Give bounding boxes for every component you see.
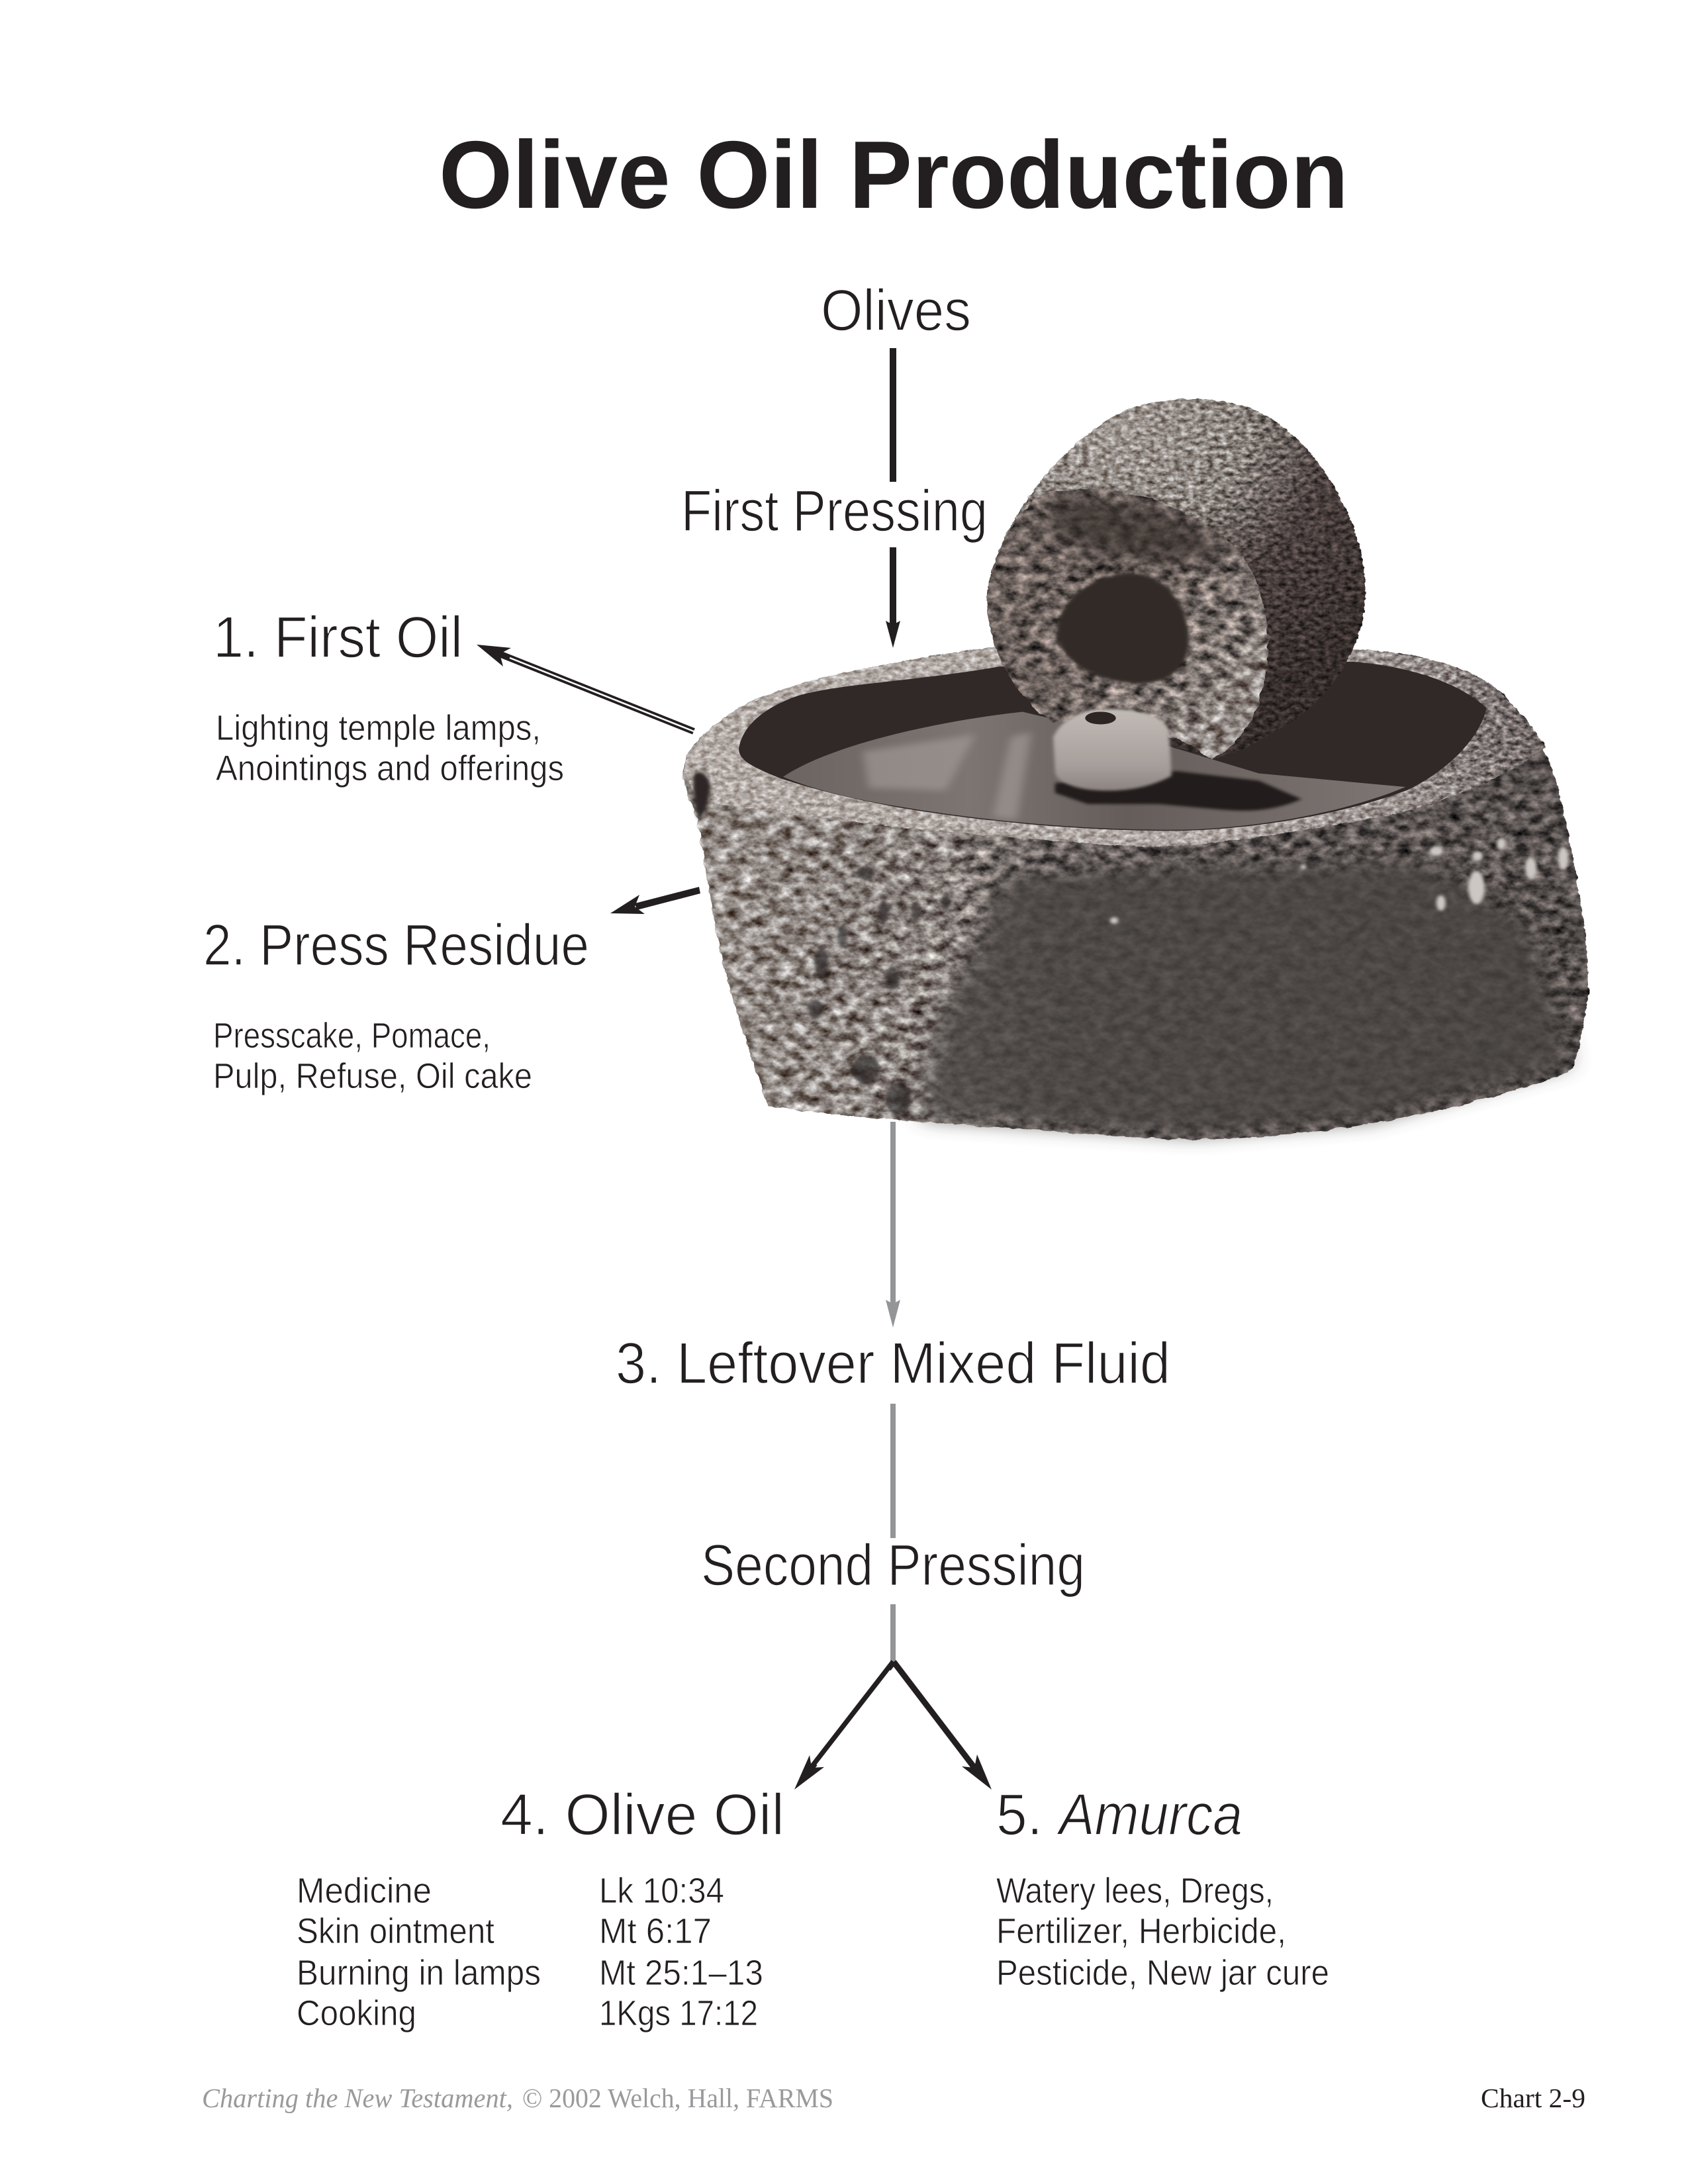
hub shadow [1055, 771, 1301, 811]
text: press residue terms [213, 1016, 532, 1096]
text: press residue terms: Pulp, Refuse, Oil cake [213, 1056, 532, 1096]
list: olive oil uses: Medicine [297, 1871, 432, 1911]
pits in lit side [808, 866, 951, 1115]
arrow: fork to amurca [894, 1662, 992, 1790]
heading: press residue: 2. Press Residue [203, 912, 589, 978]
block: olive oil [297, 1782, 784, 2033]
hub [1053, 709, 1172, 791]
illustration: stone olive press [682, 399, 1589, 1139]
label: leftover mixed fluid: 3. Leftover Mixed Fluid [616, 1330, 1170, 1396]
heading: amurca [996, 1782, 1243, 1847]
block: first oil [213, 604, 564, 788]
text: first oil uses: Lighting temple lamps, [216, 708, 541, 748]
lichen specks [1110, 838, 1569, 924]
connector: second pressing to fork [890, 1604, 896, 1662]
arrow: to press residue [610, 887, 700, 914]
text: amurca terms: Fertilizer, Herbicide, [996, 1911, 1286, 1951]
label: first pressing: First Pressing [681, 478, 988, 543]
text: amurca terms: Watery lees, Dregs, [996, 1871, 1274, 1911]
millstone hole [1058, 574, 1188, 684]
basin shadow side [922, 863, 1570, 1135]
list: olive oil uses: Burning in lamps [297, 1953, 541, 1993]
footer: chart number: Chart 2-9 [1481, 2083, 1585, 2113]
list: olive oil uses: Skin ointment [297, 1911, 494, 1951]
text: first oil uses [216, 708, 564, 788]
footer: source credit: © 2002 Welch, Hall, FARMS [522, 2083, 833, 2113]
footer: source credit: Charting the New Testament, [202, 2083, 513, 2113]
connector: leftover fluid to second pressing [890, 1404, 896, 1538]
oil surface [783, 711, 1405, 830]
list: scripture references: Mt 25:1–13 [599, 1953, 763, 1993]
basin rim [684, 647, 1546, 846]
text: first oil uses: Anointings and offerings [216, 749, 564, 788]
arrow: olives to first pressing [890, 348, 896, 482]
arrow: first pressing to basin [886, 547, 900, 648]
text: amurca terms: Pesticide, New jar cure [996, 1953, 1329, 1993]
heading: olive oil: 4. Olive Oil [500, 1782, 784, 1847]
hub hole [1085, 711, 1116, 725]
list: scripture references: 1Kgs 17:12 [599, 1993, 758, 2033]
basin inner wall [739, 662, 1487, 831]
list: scripture references: Lk 10:34 [599, 1871, 724, 1911]
heading: amurca: 5. [996, 1782, 1043, 1847]
basin body [682, 647, 1589, 1139]
block: amurca [996, 1782, 1329, 1993]
label: olives: Olives [821, 277, 971, 343]
oil reflections [863, 732, 1031, 819]
millstone face [987, 489, 1268, 759]
arrow: press to leftover fluid [886, 1122, 900, 1328]
rim notch [693, 772, 710, 819]
block: press residue [203, 912, 589, 1096]
label: second pressing: Second Pressing [701, 1532, 1085, 1598]
text: press residue terms: Presscake, Pomace, [213, 1016, 491, 1056]
list: scripture references [599, 1871, 763, 2033]
heading: amurca: Amurca [1056, 1782, 1243, 1847]
arrow: to first oil [477, 645, 694, 731]
footer: source credit [202, 2083, 833, 2113]
list: olive oil uses [297, 1871, 541, 2033]
list: olive oil uses: Cooking [297, 1993, 416, 2033]
millstone back [987, 399, 1366, 759]
millstone upper face shadow [1046, 498, 1229, 561]
list: scripture references: Mt 6:17 [599, 1911, 712, 1951]
heading: first oil: 1. First Oil [213, 604, 463, 670]
text: amurca terms [996, 1871, 1329, 1993]
arrow: fork to olive oil [794, 1662, 894, 1790]
title: Olive Oil Production [439, 121, 1348, 228]
